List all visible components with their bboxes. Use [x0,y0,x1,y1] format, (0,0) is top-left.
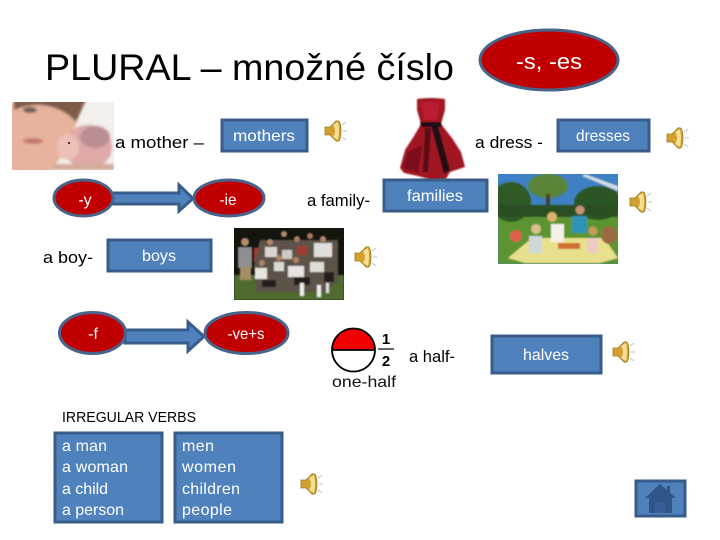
diagram: one-half: one-half [332,374,397,391]
panel: singular nouns: a child [62,481,108,498]
photo: mother and baby [10,100,114,172]
photo: team [234,228,344,300]
label: a dress: a dress - [475,133,543,152]
oval: -y: -y [78,192,92,209]
box: dresses [558,120,649,151]
heading: irregular verbs: IRREGULAR VERBS [62,409,196,426]
box: families [384,180,487,211]
diagram: one-half [332,328,397,391]
label: a family: a family- [307,191,370,210]
oval: -f [60,312,126,354]
panel: singular nouns: a person [62,502,124,519]
oval: -ve+s [205,312,288,354]
oval: -ve+s: -ve+s [228,326,264,343]
label: a boy: a boy- [43,248,93,267]
icon: speaker irregular [301,474,323,494]
box: halves: halves [523,347,569,364]
panel: plural nouns: children [182,481,240,498]
icon: speaker dresses [667,128,689,148]
panel: plural nouns: people [182,502,232,519]
panel: singular nouns: a man [62,438,107,455]
label: a half: a half- [409,347,455,366]
diagram: one-half: 1 [382,331,390,348]
photo: family picnic [491,174,622,264]
panel: plural nouns: men [182,438,214,455]
rule -f to -ve+s [60,312,288,354]
box: families: families [407,188,463,205]
label: a mother: a mother – [115,133,205,152]
arrow: -f to -ve+s [125,322,204,351]
icon: speaker boys [355,247,377,267]
oval: -ie: -ie [220,192,237,209]
icon: speaker families [630,192,652,212]
photo: red dress [400,98,465,180]
box: halves [492,336,601,373]
button: home [636,481,685,516]
oval: -f: -f [88,326,98,343]
panel: singular nouns [55,433,162,522]
box: boys [108,240,211,271]
badge: -s, -es [480,30,618,90]
box: boys: boys [142,248,176,265]
diagram: one-half: 2 [382,353,390,370]
icon: speaker mothers [325,121,347,141]
title: PLURAL – množné číslo [45,47,454,88]
panel: plural nouns: women [181,459,236,476]
badge: -s, -es: -s, -es [516,49,582,74]
icon: speaker halves [613,342,635,362]
rule -y to -ie [54,180,264,216]
oval: -ie [194,180,264,216]
panel: plural nouns [175,433,282,522]
panel: singular nouns: a woman [62,459,128,476]
box: mothers [222,120,307,151]
arrow: -y to -ie [112,185,193,211]
box: dresses: dresses [576,128,630,145]
box: mothers: mothers [233,128,295,145]
oval: -y [54,180,113,216]
